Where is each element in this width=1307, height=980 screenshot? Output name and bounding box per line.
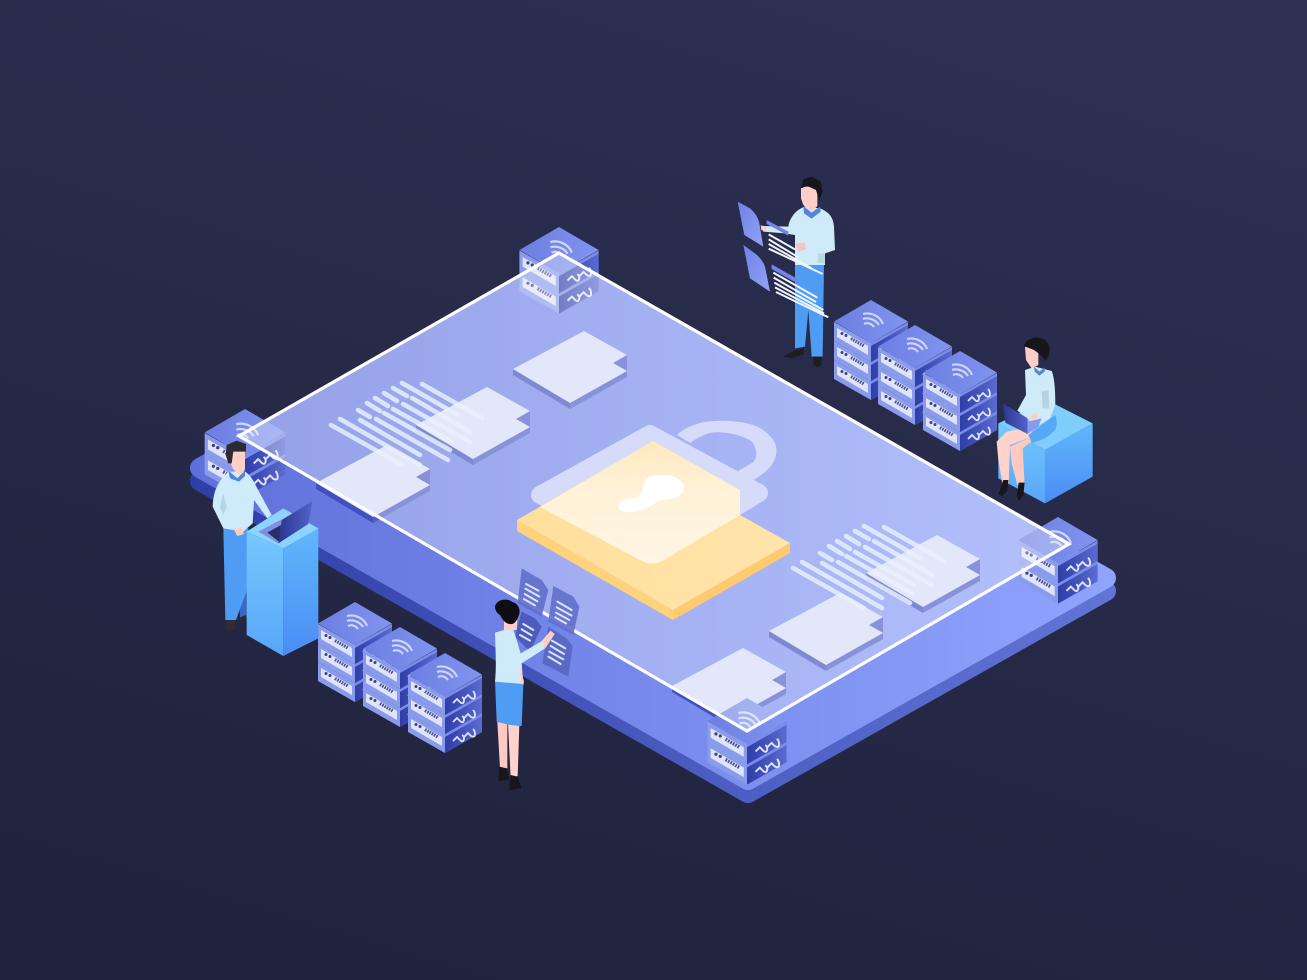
document cards on platform [316, 331, 980, 726]
shirt [495, 630, 545, 684]
skirt [1028, 415, 1057, 443]
server group: lower [318, 602, 482, 753]
floating panels [738, 202, 770, 292]
text lines: right [793, 526, 944, 608]
padlock [517, 421, 790, 620]
padlock slab [517, 441, 790, 620]
laptop [1003, 403, 1028, 434]
person: man with floating panels [738, 177, 835, 367]
padlock front plate [540, 441, 740, 564]
podium with laptop [247, 501, 318, 656]
person: man at podium [213, 441, 272, 632]
seat cube [998, 400, 1093, 503]
hair [495, 600, 520, 624]
person: woman seated on cube [997, 338, 1093, 503]
person: woman with document panels [495, 568, 579, 790]
platform base [200, 265, 1106, 793]
server stack: bottom corner [707, 698, 787, 785]
text bars over the figure [769, 234, 828, 317]
keyhole [618, 475, 684, 512]
glass panel [239, 253, 1069, 731]
legs and heels [497, 722, 522, 790]
floating document panels [515, 568, 579, 677]
shirt [1017, 367, 1055, 427]
server stack: right corner [1018, 517, 1098, 604]
shirt [762, 207, 835, 265]
padlock translucent body [540, 434, 759, 553]
server stack: left corner [205, 409, 285, 497]
legs and heels [997, 427, 1032, 501]
text lines: left [331, 383, 482, 465]
server stack: top corner [519, 227, 599, 314]
padlock shackle [677, 421, 776, 481]
skirt [495, 681, 523, 726]
legs and shoes [783, 265, 824, 367]
server group: upper [834, 300, 997, 451]
